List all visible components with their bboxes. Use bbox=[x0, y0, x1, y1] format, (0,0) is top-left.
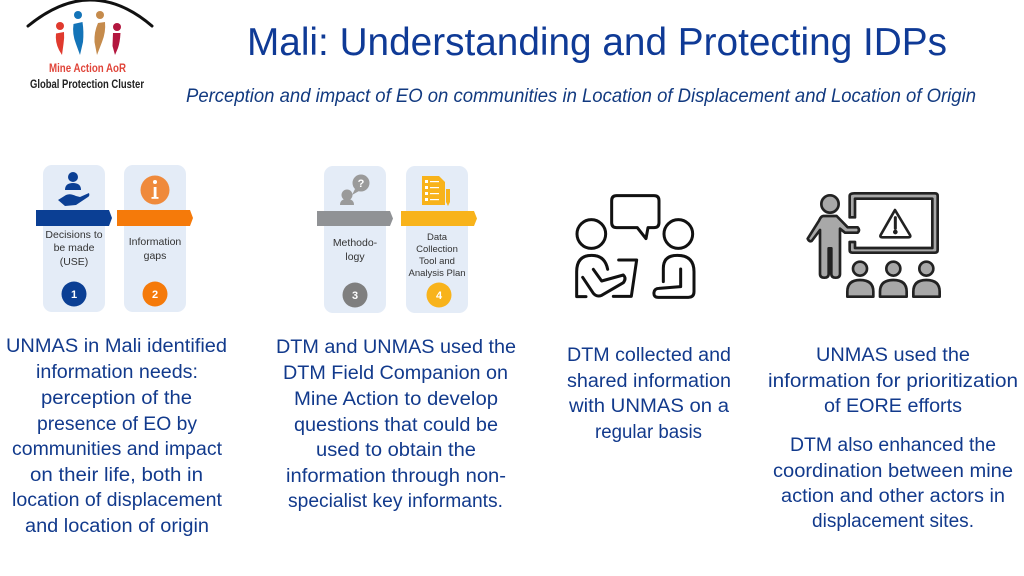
title: Mali: Understanding and Protecting IDPs bbox=[247, 21, 947, 64]
text block: data sharing bbox=[567, 345, 731, 443]
text block: information needs: and location of origin bbox=[25, 516, 209, 537]
text block: coordination: displacement sites. bbox=[812, 511, 974, 532]
text block: coordination: action and other actors in bbox=[781, 486, 1005, 507]
arrow 4 bbox=[401, 211, 477, 226]
icon: information bbox=[140, 176, 170, 204]
text block: information needs: UNMAS in Mali identified bbox=[6, 336, 227, 357]
card 4 label: Collection bbox=[416, 244, 458, 255]
text block: information needs: communities and impact bbox=[12, 439, 223, 460]
text block: data sharing: with UNMAS on a bbox=[568, 396, 729, 417]
badge 1: 1 bbox=[71, 289, 77, 301]
card 1 label: Decisions to bbox=[45, 229, 103, 241]
card 1 label: be made bbox=[54, 242, 95, 254]
presenter bbox=[821, 195, 839, 213]
text block: coordination: coordination between mine bbox=[773, 461, 1013, 482]
card 4 label: Tool and bbox=[419, 256, 455, 267]
card 1 label: (USE) bbox=[60, 256, 88, 268]
text block: information needs: presence of EO by bbox=[37, 414, 197, 435]
subtitle: Perception and impact of EO on communities in Location of Displacement and Location of Origin bbox=[186, 85, 976, 107]
text block: information needs: on their life, both in bbox=[30, 465, 203, 486]
badge 3: 3 bbox=[352, 290, 358, 302]
badge 4: 4 bbox=[436, 290, 443, 302]
icon: person with question bbox=[340, 174, 370, 205]
icon: checklist and pencil bbox=[422, 176, 450, 206]
card 4 label: Analysis Plan bbox=[408, 268, 466, 279]
logo figure: blue bbox=[73, 11, 83, 55]
logo text: Mine Action AoR: Mine Action AoR bbox=[49, 61, 126, 75]
audience bbox=[853, 262, 867, 276]
arrow 1 bbox=[36, 210, 112, 226]
text block: prioritization: UNMAS used the bbox=[816, 345, 970, 366]
logo text: Global Protection Cluster: Global Protection Cluster bbox=[30, 77, 144, 91]
text block: data sharing: DTM collected and bbox=[567, 345, 731, 366]
text block: coordination: DTM also enhanced the bbox=[790, 435, 996, 456]
logo figure: tan bbox=[94, 11, 105, 55]
card 1: decisions bbox=[43, 165, 105, 312]
text block: DTM Field Companion: information through non- bbox=[286, 466, 506, 487]
text block: prioritization: of EORE efforts bbox=[824, 396, 962, 417]
badge 2 bbox=[142, 282, 168, 306]
card 2 label: gaps bbox=[144, 250, 166, 262]
icon: two people talking bbox=[577, 196, 694, 297]
card 3 label: Methodo- bbox=[333, 237, 378, 249]
text block: DTM Field Companion: questions that could be bbox=[294, 415, 498, 436]
text block: prioritization bbox=[768, 345, 1018, 417]
text block: data sharing: shared information bbox=[567, 371, 731, 392]
text block: DTM Field Companion: specialist key informants. bbox=[288, 491, 503, 512]
icon: person in hand bbox=[58, 172, 89, 206]
panel: steps 1 and 2 bbox=[36, 165, 193, 312]
icon: person with question: ? bbox=[358, 178, 365, 190]
icon: presenter with warning board bbox=[808, 193, 940, 297]
text block: data sharing: regular basis bbox=[595, 422, 702, 443]
text block: coordination bbox=[773, 435, 1013, 532]
card 4: data collection bbox=[406, 166, 468, 313]
card 2 label: Information bbox=[129, 236, 181, 248]
board frame bbox=[850, 193, 938, 253]
text block: information needs: perception of the bbox=[41, 388, 192, 409]
logo figure: red bbox=[56, 22, 64, 55]
panel: steps 3 and 4 bbox=[317, 166, 477, 313]
text block: DTM Field Companion: used to obtain the bbox=[316, 440, 476, 461]
logo figure: crimson bbox=[112, 23, 121, 55]
arrow 2 bbox=[117, 210, 193, 226]
badge 4 bbox=[426, 282, 452, 308]
arrow 3 bbox=[317, 211, 393, 226]
text block: information needs: location of displacement bbox=[12, 490, 223, 511]
card 3 label: logy bbox=[345, 251, 365, 263]
text block: prioritization: information for prioritization bbox=[768, 371, 1018, 392]
card 4 label: Data bbox=[427, 232, 448, 243]
text block: information needs: information needs: bbox=[36, 362, 198, 383]
text block: DTM Field Companion bbox=[276, 337, 516, 512]
badge 1 bbox=[62, 282, 86, 306]
text block: information needs bbox=[6, 336, 227, 537]
badge 2: 2 bbox=[152, 289, 158, 301]
badge 3 bbox=[342, 282, 368, 308]
text block: DTM Field Companion: DTM Field Companion on bbox=[283, 363, 508, 384]
card 3: methodology bbox=[324, 166, 386, 313]
text block: DTM Field Companion: DTM and UNMAS used the bbox=[276, 337, 516, 358]
warning triangle bbox=[880, 210, 910, 237]
card 2: information gaps bbox=[124, 165, 186, 312]
text block: DTM Field Companion: Mine Action to develop bbox=[294, 389, 498, 410]
logo: Mine Action AoR bbox=[28, 0, 152, 91]
